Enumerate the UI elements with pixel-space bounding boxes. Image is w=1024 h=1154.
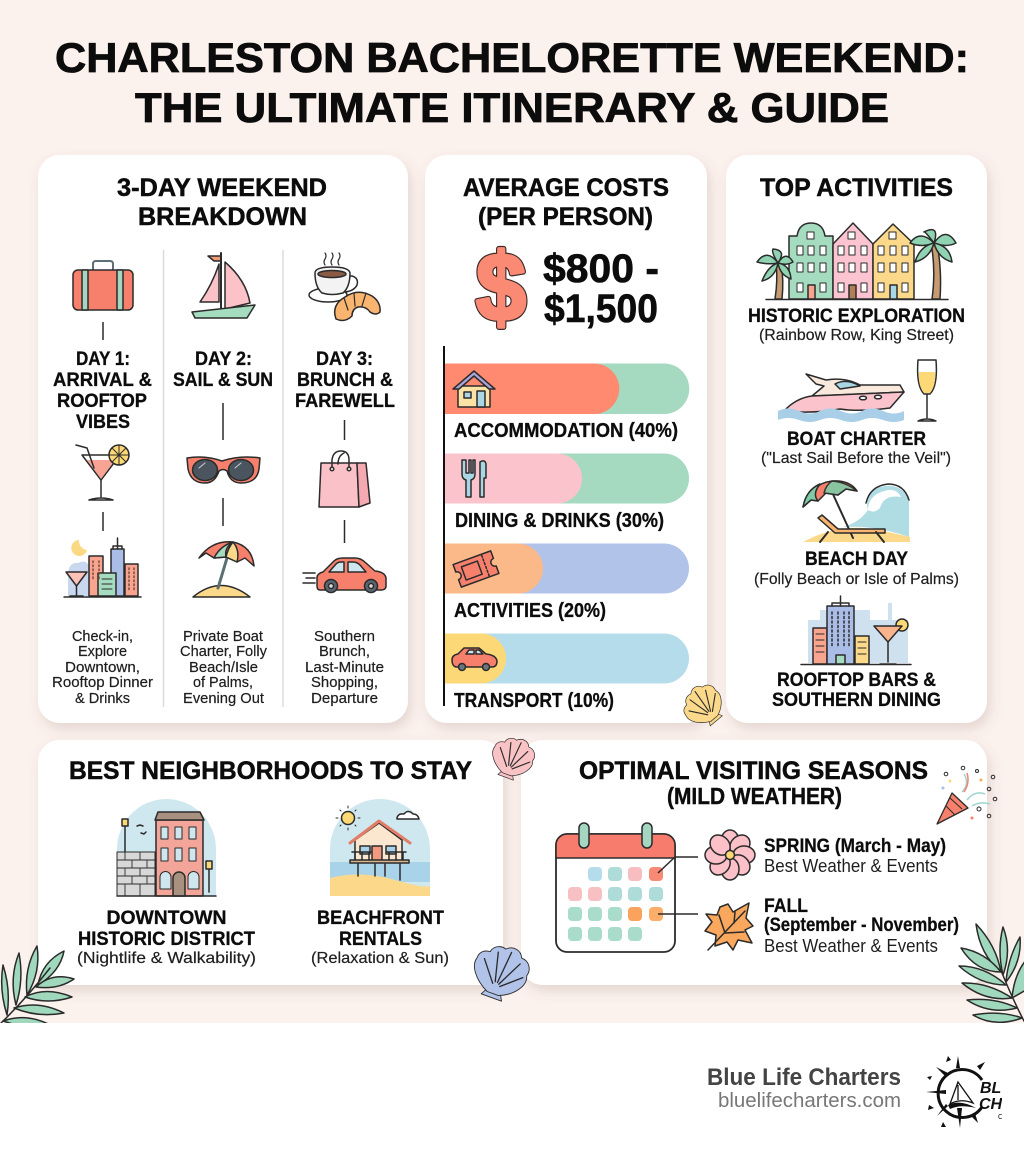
text: day 1 details: Explore <box>78 644 127 660</box>
icon: beach lounger, umbrella and wave <box>803 481 910 542</box>
icon: fork and knife <box>462 460 486 497</box>
heading: day 1: ROOFTOP <box>57 391 147 412</box>
footer: brand text: Blue Life Charters <box>707 1064 901 1091</box>
heading: day 3 <box>295 349 395 412</box>
heading: day 2 <box>173 349 273 391</box>
text: fall: (September - November) <box>764 915 959 936</box>
text: downtown historic district: (Nightlife & Walkability) <box>77 950 256 967</box>
text: downtown historic district: HISTORIC DISTRICT <box>78 928 255 950</box>
text: boat charter: ("Last Sail Before the Veil") <box>761 450 951 467</box>
text: downtown historic district <box>77 907 256 967</box>
total cost range: $800 - <box>543 247 659 291</box>
text: boat charter <box>761 428 951 467</box>
icon: shopping bag <box>319 451 370 507</box>
text: day 3 details <box>305 629 384 707</box>
icon: yacht and champagne <box>778 360 936 422</box>
icon: sunglasses <box>187 457 260 483</box>
icon: cocktail <box>76 445 129 500</box>
text: day 2 details: of Palms, <box>193 675 253 691</box>
icon: ticket <box>453 551 499 587</box>
panel: optimal visiting seasons <box>521 740 987 985</box>
total cost range <box>543 247 659 331</box>
icon: fall leaf <box>705 903 753 950</box>
icon: beachfront rental <box>330 799 430 896</box>
bar: activities 20%: ACTIVITIES (20%) <box>454 600 606 622</box>
bar: dining and drinks 30% <box>444 454 689 532</box>
panel: top activities <box>726 155 987 723</box>
heading: 3-day weekend breakdown: BREAKDOWN <box>138 203 307 231</box>
decoration: right palm frond <box>959 924 1024 1022</box>
total cost range: $1,500 <box>544 287 658 331</box>
bar: dining and drinks 30%: DINING & DRINKS (30%) <box>455 510 664 532</box>
text: day 1 details: Check-in, <box>72 629 133 645</box>
bar: transport 10%: TRANSPORT (10%) <box>454 690 614 712</box>
text: day 3 details: Departure <box>311 691 378 707</box>
text: beachfront rentals: RENTALS <box>339 928 422 950</box>
footer: compass logo <box>926 1056 1002 1128</box>
text: beach day: BEACH DAY <box>805 548 908 570</box>
icon: car with speed lines <box>303 558 386 592</box>
heading: 3-day weekend breakdown: 3-DAY WEEKEND <box>117 174 327 202</box>
panel: best neighborhoods <box>38 740 503 985</box>
heading: day 1: ARRIVAL & <box>53 370 152 391</box>
text: day 1 details: & Drinks <box>75 691 130 707</box>
icon: sailboat <box>192 253 255 318</box>
footer: compass logo: BLUE <box>980 1080 1024 1097</box>
icon: small car <box>452 648 497 670</box>
text: day 3 details: Shopping, <box>311 675 378 691</box>
text: day 3 details: Southern <box>314 629 375 645</box>
heading: day 1 <box>53 349 152 433</box>
text: day 1 details <box>52 629 153 707</box>
heading: day 3: BRUNCH & <box>297 370 393 391</box>
heading: optimal visiting seasons: (MILD WEATHER) <box>667 783 842 809</box>
title: CHARLESTON BACHELORETTE WEEKEND: <box>55 34 969 81</box>
text: day 1 details: Downtown, <box>65 660 140 676</box>
text: beach day: (Folly Beach or Isle of Palms) <box>754 571 959 588</box>
icon: suitcase <box>73 261 133 310</box>
heading: optimal visiting seasons <box>579 757 928 809</box>
text: fall: FALL <box>764 896 808 917</box>
text: historic exploration <box>748 305 965 344</box>
panel: average costs <box>425 155 707 723</box>
bar chart: cost breakdown <box>444 346 689 712</box>
footer: compass logo: CO <box>998 1114 1009 1121</box>
text: beachfront rentals: (Relaxation & Sun) <box>311 950 449 967</box>
icon: dollar sign: $ <box>476 234 526 341</box>
text: fall <box>764 896 959 956</box>
icon: dollar sign: $ <box>476 234 526 341</box>
text: day 2 details <box>180 629 268 707</box>
icon: spring flower <box>705 830 755 880</box>
decoration: pink shell <box>486 731 539 784</box>
text: rooftop bars and southern dining: SOUTHERN DINING <box>772 689 941 711</box>
heading: 3-day weekend breakdown <box>117 174 327 231</box>
heading: average costs <box>463 174 669 231</box>
text: day 3 details: Brunch, <box>319 644 370 660</box>
text: rooftop bars and southern dining: ROOFTOP BARS & <box>777 669 936 691</box>
heading: optimal visiting seasons: OPTIMAL VISITING SEASONS <box>579 757 928 785</box>
text: day 2 details: Beach/Isle <box>189 660 258 676</box>
heading: day 1: VIBES <box>76 412 130 433</box>
bar: transport 10% <box>444 634 689 712</box>
text: historic exploration: (Rainbow Row, King Street) <box>759 327 954 344</box>
footer band <box>0 1023 1024 1154</box>
text: spring: SPRING (March - May) <box>764 836 946 857</box>
text: day 2 details: Evening Out <box>183 691 264 707</box>
icon: skyline with cocktail <box>64 538 141 597</box>
text: downtown historic district: DOWNTOWN <box>106 907 226 929</box>
decoration: blue shell <box>465 937 535 1007</box>
text: day 2 details: Private Boat <box>183 629 263 645</box>
text: spring: Best Weather & Events <box>764 856 938 876</box>
text: day 1 details: Rooftop Dinner <box>52 675 153 691</box>
title <box>55 34 969 131</box>
icon: coffee and croissant <box>309 253 380 320</box>
text: day 3 details: Last-Minute <box>305 660 384 676</box>
heading: day 1: DAY 1: <box>76 349 130 370</box>
bar: accommodation 40% <box>444 364 689 442</box>
text: fall: Best Weather & Events <box>764 936 938 956</box>
footer: brand text <box>707 1064 901 1112</box>
text: beachfront rentals <box>311 907 449 967</box>
heading: best neighborhoods: BEST NEIGHBORHOODS TO STAY <box>69 757 472 785</box>
heading: average costs: (PER PERSON) <box>478 203 653 231</box>
heading: day 3: FAREWELL <box>295 391 395 412</box>
bar: accommodation 40%: ACCOMMODATION (40%) <box>454 420 678 442</box>
heading: day 2: DAY 2: <box>195 349 252 370</box>
icon: house <box>453 371 495 407</box>
decoration: left palm frond <box>0 946 74 1028</box>
footer: brand text: bluelifecharters.com <box>718 1090 901 1112</box>
text: boat charter: BOAT CHARTER <box>787 428 926 450</box>
text: historic exploration: HISTORIC EXPLORATION <box>748 305 965 327</box>
text: spring <box>764 836 946 876</box>
icon: historic downtown building <box>117 799 216 896</box>
panel: 3-day weekend breakdown <box>38 155 408 723</box>
text: beach day <box>754 548 959 588</box>
heading: average costs: AVERAGE COSTS <box>463 174 669 202</box>
text: rooftop bars and southern dining <box>772 669 941 711</box>
icon: rainbow row houses and palms <box>757 223 956 300</box>
title: THE ULTIMATE ITINERARY & GUIDE <box>135 84 889 131</box>
icon: party popper <box>937 766 997 824</box>
decoration: yellow shell <box>675 678 731 734</box>
icon: rooftop bar skyline <box>801 596 911 664</box>
icon: calendar <box>556 823 675 952</box>
icon: beach umbrella <box>193 542 254 597</box>
heading: top activities: TOP ACTIVITIES <box>760 174 953 202</box>
heading: day 3: DAY 3: <box>316 349 373 370</box>
text: day 2 details: Charter, Folly <box>180 644 268 660</box>
bar: activities 20% <box>444 544 689 622</box>
text: beachfront rentals: BEACHFRONT <box>317 907 444 929</box>
heading: day 2: SAIL & SUN <box>173 370 273 391</box>
